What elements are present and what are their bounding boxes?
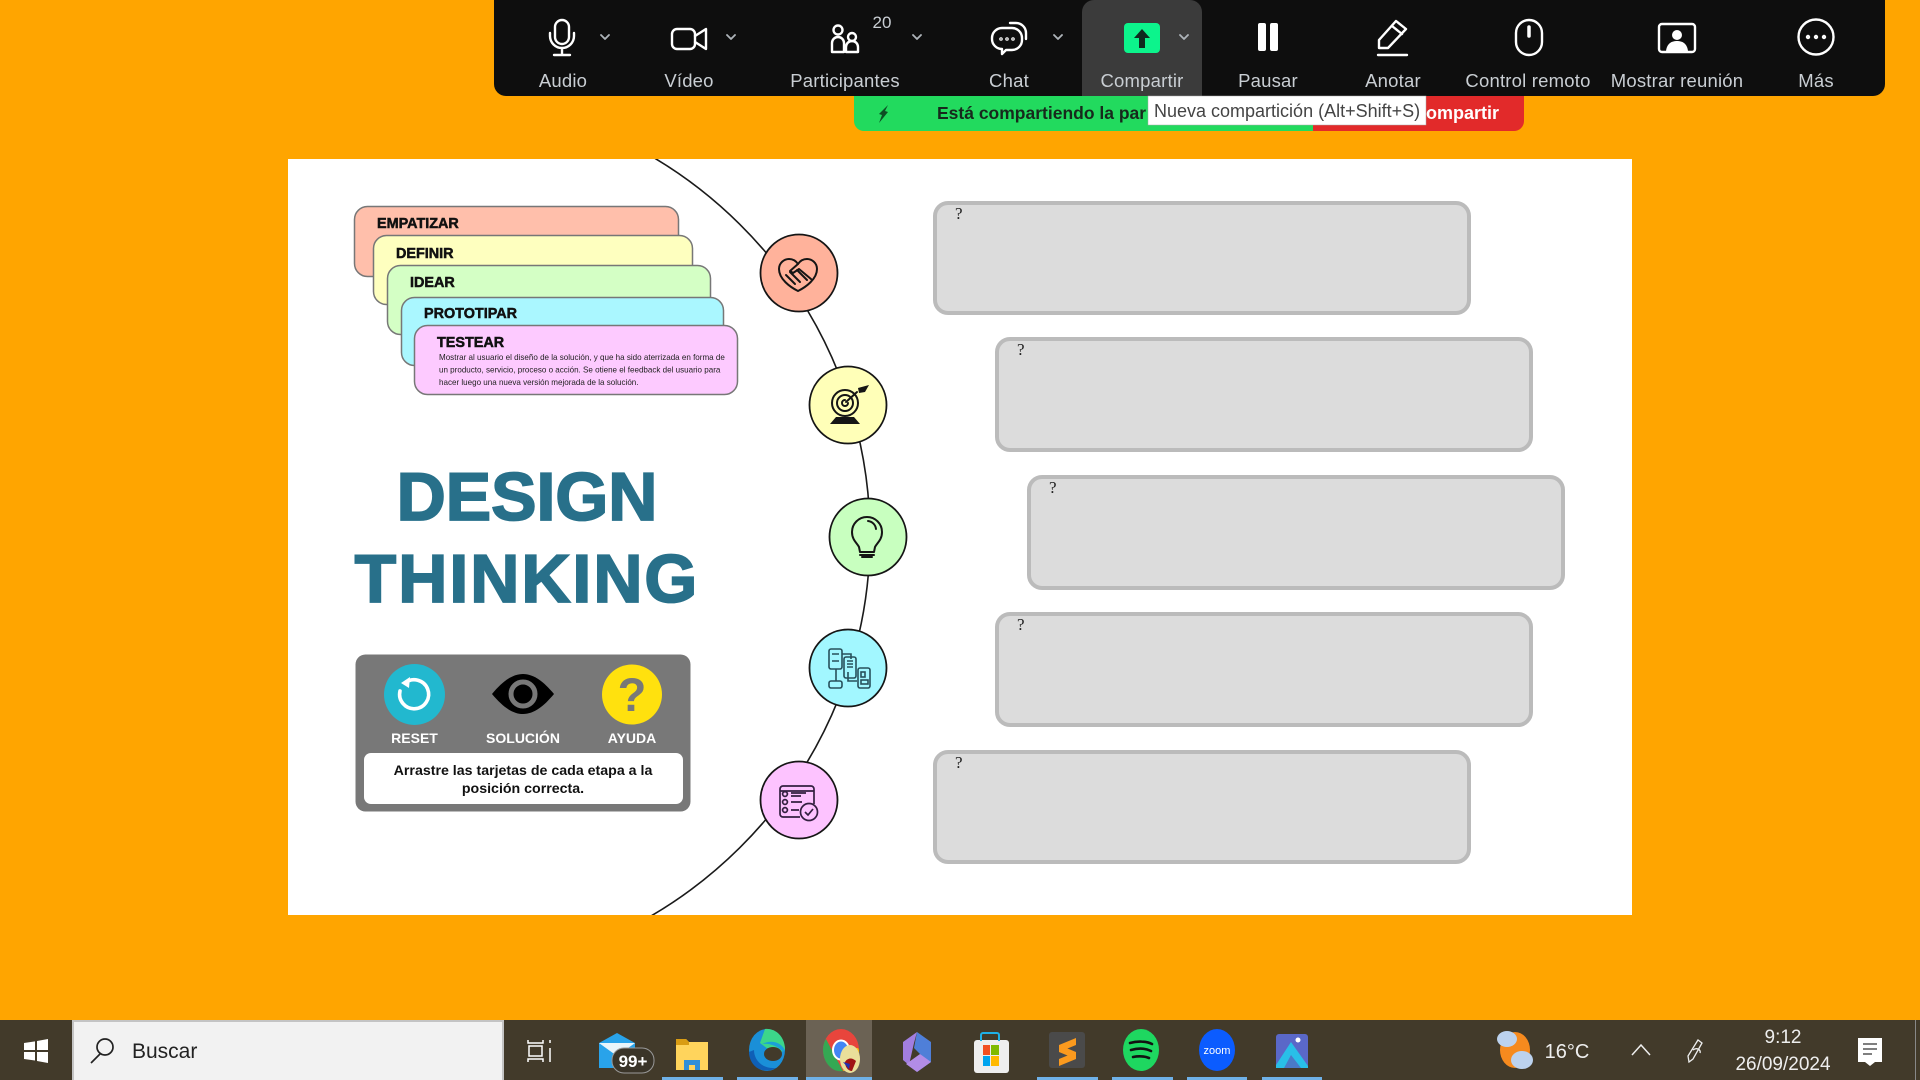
toolbar labels: Control remoto <box>1465 70 1591 91</box>
icon: show meeting <box>1659 24 1695 52</box>
icon: mail with badge: 99+ <box>619 1052 647 1071</box>
icon: video camera <box>672 29 706 49</box>
toolbar labels: Pausar <box>1238 70 1298 91</box>
drop box 5: ? <box>955 753 963 772</box>
icon: photos <box>1276 1034 1308 1068</box>
title: DESIGN <box>397 459 657 535</box>
instruction box <box>364 753 683 804</box>
tooltip: Nueva compartición (Alt+Shift+S) <box>1154 101 1420 121</box>
drop box 3: ? <box>1049 478 1057 497</box>
icon: microphone <box>550 20 574 55</box>
panel: controls <box>356 654 690 812</box>
toolbar labels: Vídeo <box>664 70 714 91</box>
icon: handshake heart <box>779 259 817 291</box>
icon: participants <box>832 26 858 52</box>
toolbar labels: Audio <box>539 70 587 91</box>
icon: eye <box>492 674 554 714</box>
drop box 1 <box>935 203 1469 313</box>
card: empatizar: EMPATIZAR <box>377 216 459 232</box>
drop box 4 <box>997 614 1531 725</box>
drop box 4: ? <box>1017 615 1025 634</box>
icon: share arrow <box>1124 23 1160 53</box>
icon: edge <box>749 1029 785 1071</box>
icon: zoom: zoom <box>1204 1045 1230 1057</box>
card: prototipar: PROTOTIPAR <box>424 306 518 322</box>
icon: spotify <box>1123 1029 1159 1071</box>
toolbar labels: Compartir <box>1100 70 1184 91</box>
search box <box>73 1021 503 1080</box>
icon: bolt <box>879 105 888 123</box>
drop box 1: ? <box>955 204 963 223</box>
circle: empathize <box>760 234 838 312</box>
card: prototipar <box>402 298 724 366</box>
icon: pause <box>1258 23 1278 51</box>
icon: pen tray <box>1688 1040 1702 1062</box>
instruction box: posición correcta. <box>462 781 584 797</box>
toolbar labels: Chat <box>989 70 1029 91</box>
tooltip <box>1148 96 1426 125</box>
icon: store <box>974 1033 1009 1073</box>
control labels: RESET <box>391 730 438 746</box>
taskbar highlight: active app <box>806 1020 872 1080</box>
icon: checklist <box>780 786 818 820</box>
drop box 2 <box>997 339 1531 450</box>
icon: zoom <box>1199 1029 1235 1071</box>
icon: magnifier <box>91 1039 113 1063</box>
card: testear: hacer luego una nueva versión mejorada de la solución. <box>439 378 639 387</box>
toolbar labels: Anotar <box>1365 70 1421 91</box>
title <box>355 459 699 617</box>
icon: sublime text <box>1049 1032 1085 1068</box>
card: testear <box>414 326 738 394</box>
icon: task view <box>528 1040 550 1062</box>
arc connecting stages <box>651 159 870 915</box>
card: idear <box>388 266 710 334</box>
panel: taskbar <box>0 1020 1920 1080</box>
circle: define <box>810 366 886 444</box>
control labels <box>391 729 656 746</box>
icon: target <box>830 385 869 424</box>
toolbar labels <box>539 70 1834 91</box>
circle: prototype <box>810 630 886 706</box>
icon: tray caret <box>1632 1045 1650 1055</box>
icon: remote control mouse <box>1516 20 1542 55</box>
toolbar labels: Más <box>1798 70 1834 91</box>
temperature: 16°C <box>1545 1041 1589 1063</box>
panel: sharing banner <box>854 96 1524 131</box>
toolbar labels: Mostrar reunión <box>1611 70 1743 91</box>
icon: windows start <box>24 1039 48 1063</box>
stop sharing text: ompartir <box>1426 103 1499 123</box>
card: empatizar <box>354 206 678 276</box>
share button highlight <box>1082 0 1202 96</box>
icon: more <box>1798 20 1834 54</box>
title: THINKING <box>355 541 699 617</box>
banner text: Está compartiendo la par <box>937 103 1146 123</box>
clock <box>1735 1027 1831 1075</box>
panel: slide <box>288 159 1632 915</box>
icon: annotate pencil <box>1378 21 1407 55</box>
card: testear: Mostrar al usuario el diseño de la solución, y que ha sido aterrizada en forma de <box>439 353 725 362</box>
control labels: SOLUCIÓN <box>486 729 560 746</box>
icon: chat <box>992 23 1026 54</box>
card: testear: un producto, servicio, proceso o acción. Se otiene el feedback del usuario para <box>439 366 721 374</box>
card: definir: DEFINIR <box>396 246 454 262</box>
clock: 26/09/2024 <box>1735 1054 1831 1075</box>
icon: chrome <box>823 1029 860 1073</box>
card: idear: IDEAR <box>410 275 455 291</box>
running app indicators <box>662 1077 1322 1080</box>
panel: meeting toolbar <box>494 0 1885 96</box>
control labels: AYUDA <box>608 730 656 746</box>
circle: ideate <box>830 498 906 576</box>
icon: reset <box>384 664 445 725</box>
drop box 2: ? <box>1017 340 1025 359</box>
icon: light bulb <box>852 517 882 557</box>
icon: mail with badge <box>599 1033 654 1073</box>
card: testear: TESTEAR <box>437 335 505 351</box>
icon: help: ? <box>618 668 646 721</box>
drop box 3 <box>1029 477 1563 588</box>
icon: copilot <box>903 1032 931 1072</box>
icon: file explorer <box>676 1039 708 1070</box>
panel: stage cards <box>354 206 738 394</box>
icon: weather <box>1497 1031 1533 1069</box>
toolbar labels: Participantes <box>790 70 900 91</box>
dropdown chevrons <box>601 35 1188 39</box>
icon: notifications <box>1858 1038 1882 1066</box>
icon: help <box>602 664 662 724</box>
icon: prototype flow <box>829 649 870 688</box>
clock: 9:12 <box>1765 1027 1801 1048</box>
card: definir <box>374 236 692 304</box>
drop box 5 <box>935 752 1469 862</box>
participants count: 20 <box>873 13 891 32</box>
circle: test <box>760 762 838 838</box>
instruction box: Arrastre las tarjetas de cada etapa a la <box>394 763 652 779</box>
search placeholder: Buscar <box>132 1040 197 1063</box>
